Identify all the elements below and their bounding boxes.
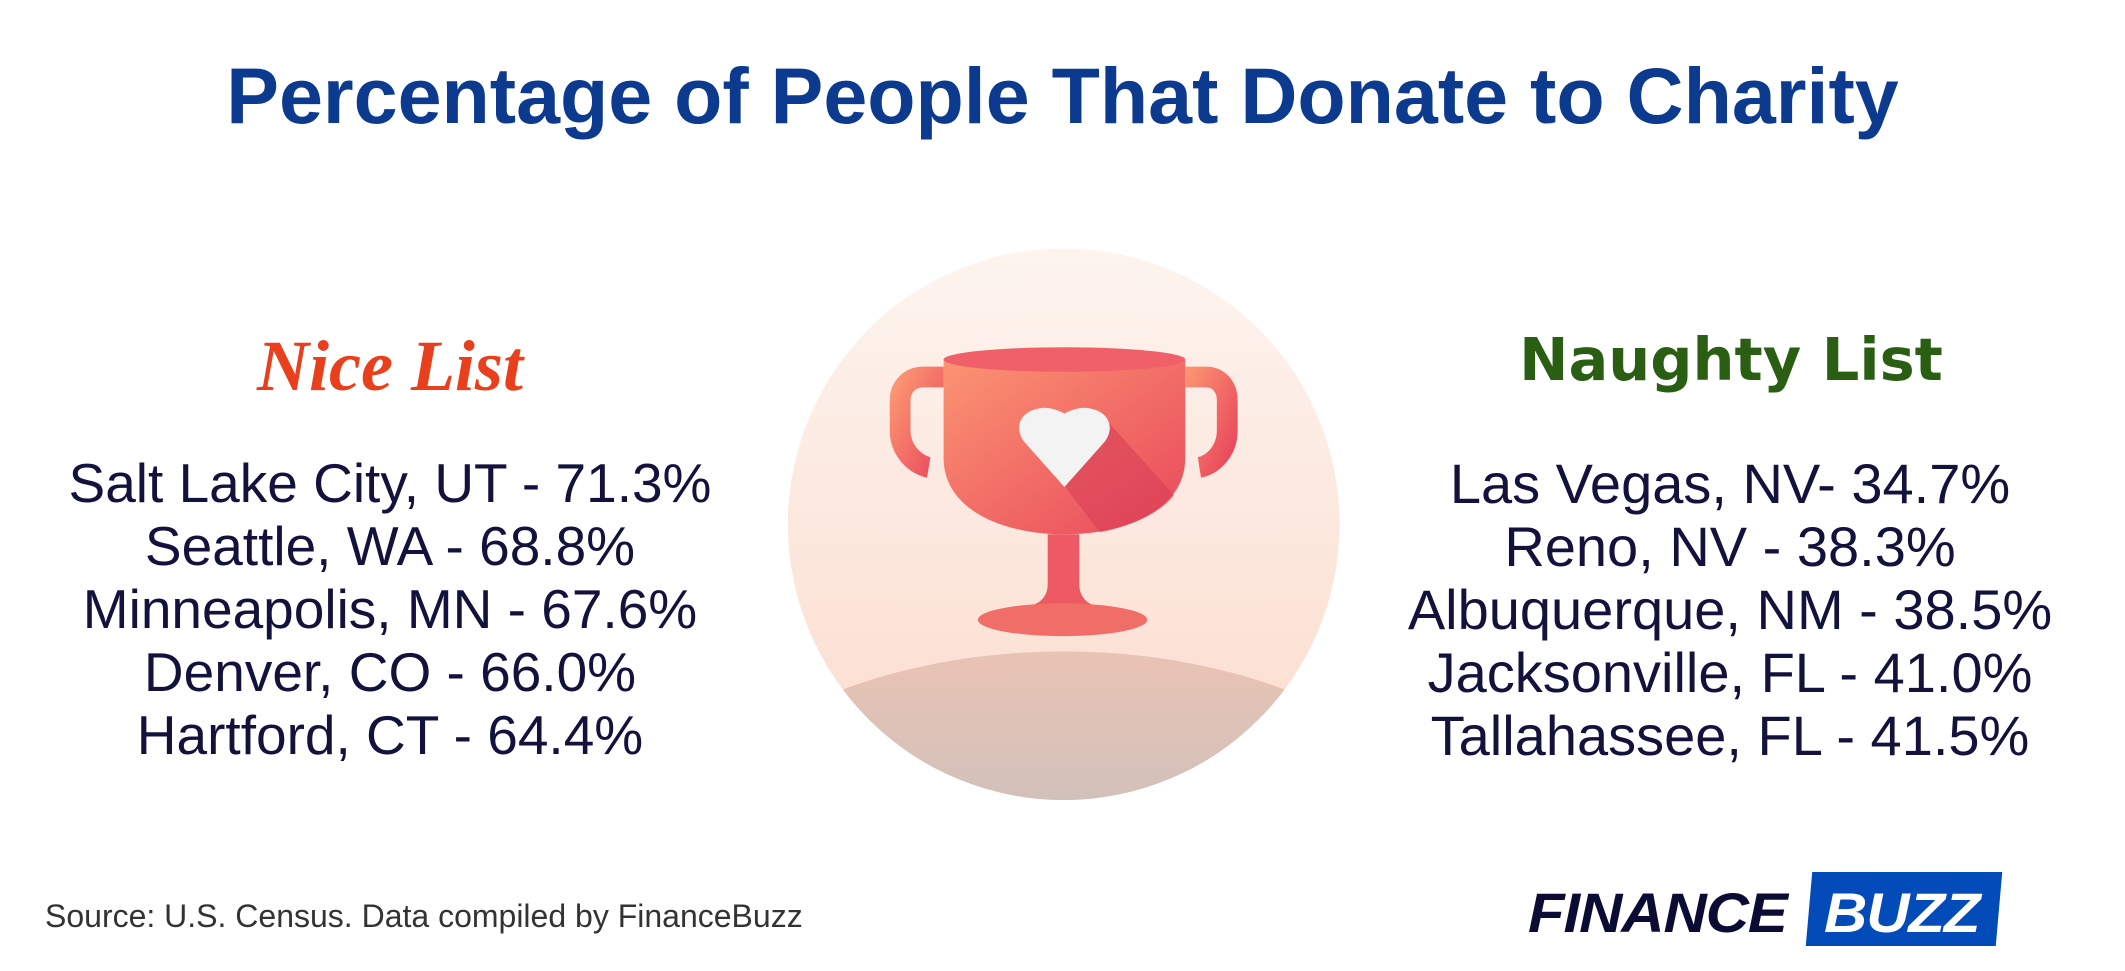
heading: nice list: Nice List xyxy=(257,326,523,406)
list: nice: Salt Lake City, UT - 71.3% xyxy=(69,452,711,514)
logo: financebuzz: BUZZ xyxy=(1824,881,1979,944)
list: nice: Denver, CO - 66.0% xyxy=(144,641,636,703)
list: naughty xyxy=(1408,452,2052,767)
list: nice: Hartford, CT - 64.4% xyxy=(137,704,643,766)
list: naughty: Reno, NV - 38.3% xyxy=(1504,515,1956,578)
list: nice: Minneapolis, MN - 67.6% xyxy=(83,578,697,640)
source note: Source: U.S. Census. Data compiled by FinanceBuzz xyxy=(45,898,803,934)
logo: financebuzz: FINANCE xyxy=(1528,881,1787,944)
icon: trophy in circle xyxy=(788,248,1340,800)
list: naughty: Albuquerque, NM - 38.5% xyxy=(1408,578,2052,641)
list: nice xyxy=(69,452,711,766)
title: Percentage of People That Donate to Charity xyxy=(226,51,1899,140)
list: nice: Seattle, WA - 68.8% xyxy=(145,515,635,577)
list: naughty: Tallahassee, FL - 41.5% xyxy=(1431,704,2029,767)
list: naughty: Las Vegas, NV- 34.7% xyxy=(1450,452,2010,515)
list: naughty: Jacksonville, FL - 41.0% xyxy=(1428,641,2032,704)
logo: financebuzz xyxy=(1528,872,2002,946)
heading: naughty list: Naughty List xyxy=(1519,325,1943,394)
